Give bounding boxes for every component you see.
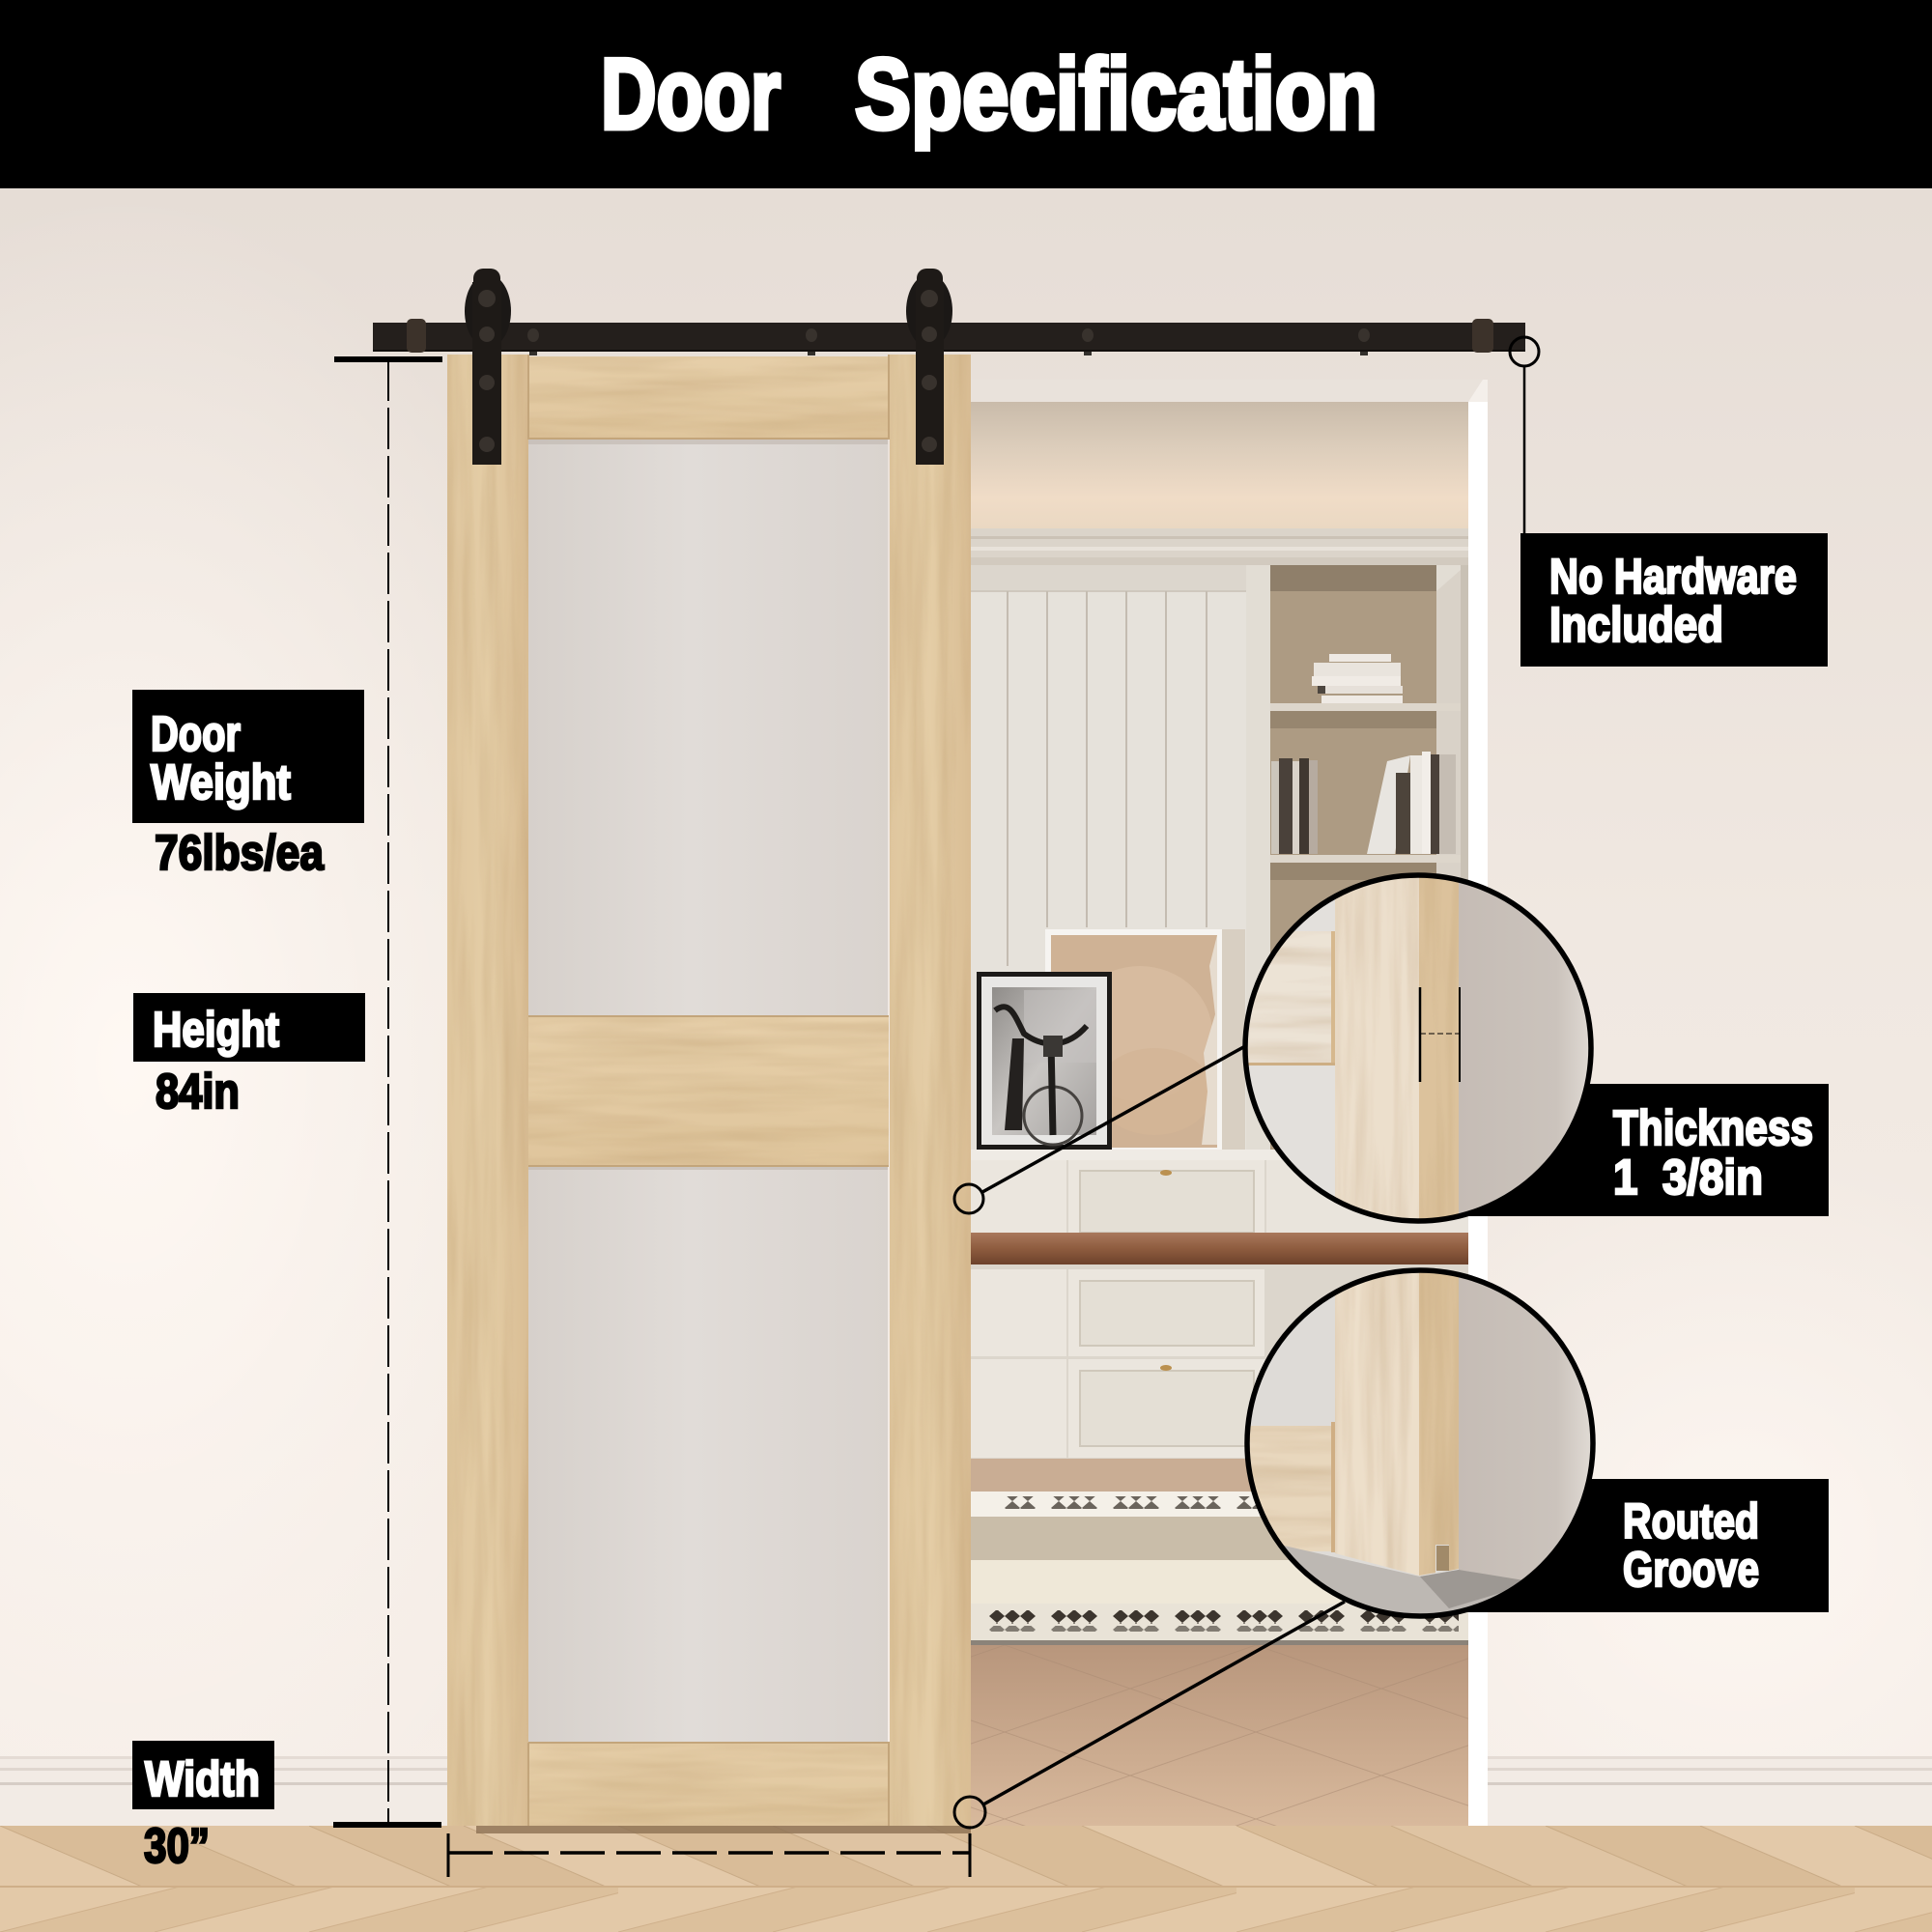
crown moulding [971, 528, 1468, 565]
door stiles [447, 355, 971, 1826]
barn door [447, 355, 971, 1826]
books [1271, 654, 1456, 854]
glass panels [528, 440, 888, 1742]
width dimension line [448, 1833, 970, 1877]
walnut shelf [971, 1233, 1468, 1264]
bookcase [1246, 565, 1468, 1151]
callout: thickness [954, 869, 1829, 1227]
door opening and room view [970, 380, 1488, 1826]
callout: no hardware included: Included [1549, 597, 1723, 652]
title: Specification [855, 39, 1378, 151]
callout: routed groove [954, 1265, 1829, 1828]
label: width: Width [145, 1751, 260, 1806]
callout: no hardware included: No Hardware [1549, 549, 1797, 604]
callout: thickness: Thickness [1613, 1100, 1813, 1155]
label: door weight: Weight [151, 754, 291, 810]
label: width [132, 1741, 274, 1873]
baseboard [0, 1756, 1932, 1826]
wood floor [0, 1826, 1932, 1932]
left hanger [465, 269, 511, 465]
title: Door [601, 39, 781, 151]
watercolour frame [1045, 929, 1222, 1150]
callout: routed groove: Groove [1623, 1542, 1759, 1597]
bicycle photo frame [977, 972, 1112, 1150]
title [601, 39, 1378, 151]
label: door weight: Door [151, 706, 241, 761]
cabinets [971, 1150, 1468, 1459]
detail circle: routed groove [1241, 1265, 1599, 1623]
title bar [0, 0, 1932, 188]
thickness measure mark [1420, 987, 1460, 1082]
label: height: 84in [156, 1064, 240, 1119]
room ceiling [971, 402, 1468, 529]
callout: routed groove: Routed [1623, 1493, 1759, 1548]
door rails [528, 355, 889, 1826]
label: door weight: 76lbs/ea [155, 825, 325, 880]
label: height: Height [153, 1002, 279, 1057]
label: height [133, 993, 365, 1119]
callout: no hardware included [1510, 337, 1828, 667]
barn door hardware: rail, hangers and bolts [373, 269, 1525, 465]
callout: thickness: 1 3/8in [1613, 1150, 1763, 1205]
right hanger [906, 269, 952, 465]
detail circle: door edge thickness [1241, 869, 1599, 1227]
rug and room floor [971, 1459, 1468, 1826]
paneled wall [971, 565, 1246, 1151]
height dimension line [333, 356, 442, 1828]
label: door weight [132, 690, 364, 880]
label: width: 30” [144, 1818, 210, 1873]
